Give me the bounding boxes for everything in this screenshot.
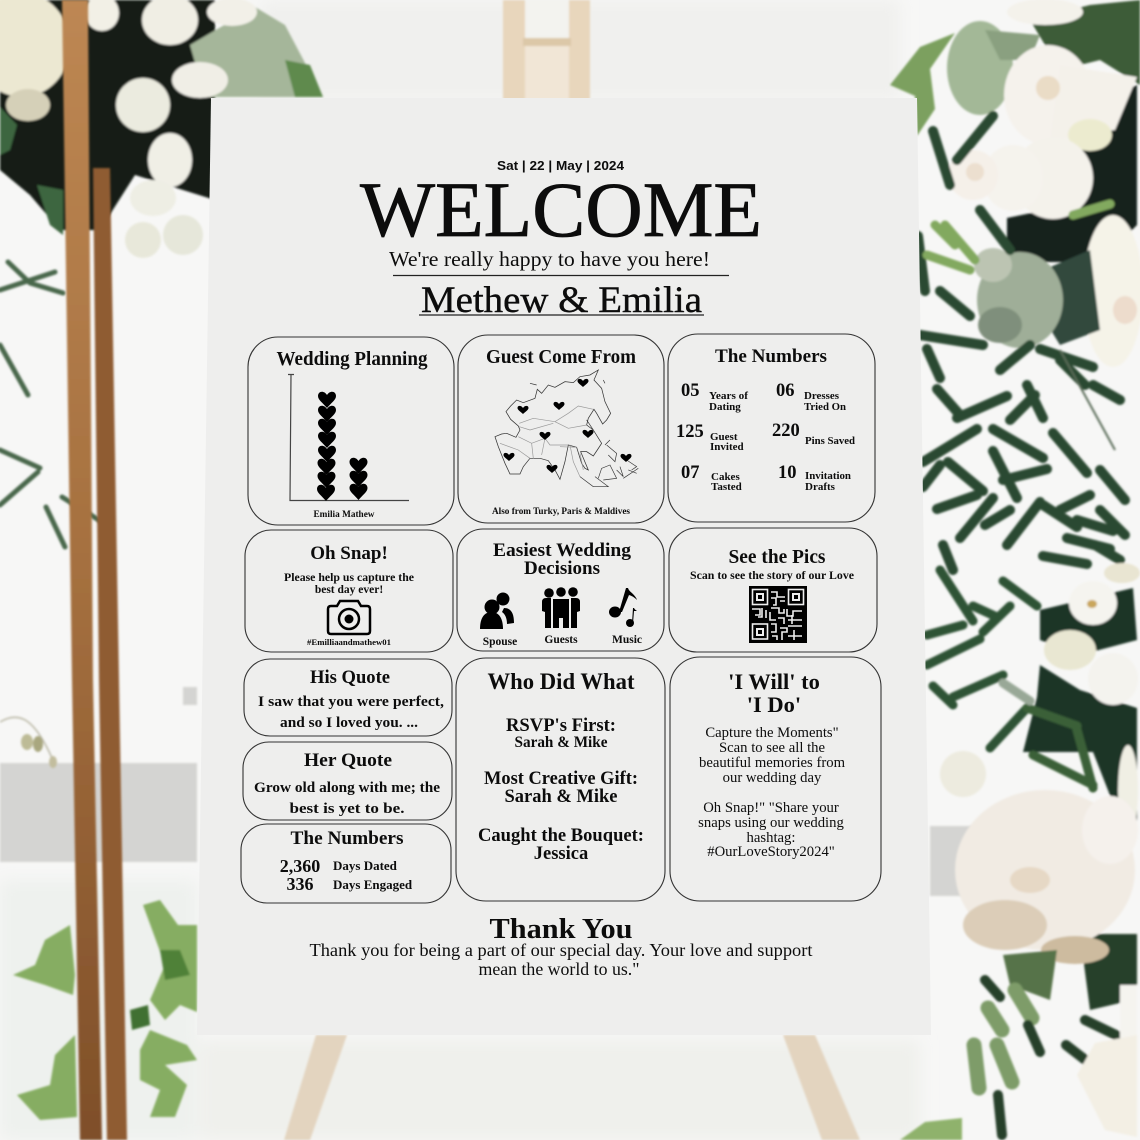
stat: invitation drafts: Drafts [805, 481, 836, 493]
foliage: bottom-left leaves [13, 900, 197, 1120]
share text: Oh Snap!" "Share your [703, 800, 839, 816]
stat: pins saved [772, 421, 855, 447]
easel legs [284, 1035, 860, 1140]
map caption: Also from Turky, Paris & Maldives [492, 507, 630, 517]
item: caught the bouquet: Jessica [534, 844, 588, 864]
capture text [699, 725, 846, 786]
share text: #OurLoveStory2024" [707, 844, 835, 860]
heading: oh snap: Oh Snap! [310, 543, 388, 564]
request text [284, 572, 414, 596]
heading: easiest decisions: Easiest Wedding [493, 540, 632, 561]
capture text: Scan to see all the [719, 740, 825, 756]
couple names: Methew & Emilia [421, 280, 702, 321]
stat: days dated: Days Dated [333, 858, 398, 873]
panel: his quote [244, 659, 452, 736]
item: most creative gift: Sarah & Mike [504, 787, 618, 807]
fence rails [0, 687, 975, 896]
heading: easiest decisions: Decisions [524, 558, 600, 579]
heading: the numbers: The Numbers [715, 346, 827, 367]
heading: her quote: Her Quote [304, 750, 392, 771]
request text: best day ever! [315, 584, 383, 596]
heart column: Emilia [317, 392, 336, 501]
stat: dresses tried on: Dresses [804, 390, 840, 402]
stat: dresses tried on [776, 381, 846, 413]
foliage: right arrangement [890, 0, 1140, 1140]
quote text [258, 694, 444, 731]
icon labels: Spouse [483, 636, 517, 648]
thank you heading: Thank You [490, 913, 632, 945]
panel: who did what [456, 658, 665, 901]
stat: cakes tasted: Tasted [711, 481, 742, 493]
stat: pins saved: 220 [772, 421, 800, 441]
stat: days engaged: Days Engaged [333, 877, 413, 892]
heading: I will to I do [728, 669, 820, 717]
stat: invitation drafts: Invitation [805, 470, 851, 482]
item: caught the bouquet [478, 825, 644, 864]
map of Asia [495, 370, 638, 487]
stat: days dated: 2,360 [280, 856, 320, 876]
panel: guest come from [458, 335, 664, 523]
stat: invitation drafts [778, 463, 851, 493]
chart labels: Emilia Mathew [314, 509, 375, 519]
stat: guest invited: Invited [710, 441, 744, 453]
thank you message: mean the world to us." [478, 959, 640, 979]
capture text: Capture the Moments" [705, 725, 839, 741]
icon: guests [542, 587, 580, 628]
request text: Please help us capture the [284, 572, 414, 584]
item: RSVP first: Sarah & Mike [514, 734, 608, 751]
stat: cakes tasted: 07 [681, 463, 700, 483]
stat: pins saved: Pins Saved [805, 435, 855, 447]
quote text: I saw that you were perfect, [258, 694, 444, 710]
stat: guest invited: 125 [676, 422, 704, 442]
heart column: Mathew [350, 458, 368, 500]
easel top [503, 0, 590, 100]
heading: the numbers: The Numbers [290, 828, 404, 849]
icon labels: Guests [544, 634, 578, 646]
title: WELCOME: WELCOME [360, 166, 762, 253]
share text: hashtag: [747, 830, 795, 846]
subtitle: We're really happy to have you here! [389, 247, 710, 271]
panel: oh snap [245, 530, 453, 652]
stat: days dated [280, 856, 398, 876]
heading: see the pics: See the Pics [728, 547, 826, 568]
stat: guest invited [676, 422, 744, 453]
capture text: beautiful memories from [699, 755, 846, 771]
poster board [197, 98, 931, 1035]
thank you message [310, 940, 812, 979]
panel: see the pics [669, 528, 877, 652]
share text [698, 800, 844, 860]
panel: easiest wedding decisions [457, 529, 664, 651]
stat: guest invited: Guest [710, 431, 738, 443]
capture text: our wedding day [723, 770, 822, 786]
item: RSVP first [506, 715, 616, 751]
icon: camera [328, 601, 370, 634]
stat: dresses tried on: 06 [776, 381, 794, 401]
heading: guest come from: Guest Come From [486, 347, 636, 368]
item: RSVP first: RSVP's First: [506, 715, 616, 736]
quote text [254, 780, 441, 817]
item: most creative gift [484, 768, 638, 807]
stat: days engaged [286, 874, 413, 894]
stat: years of dating [681, 381, 748, 413]
stat: years of dating: 05 [681, 381, 700, 401]
icon: QR code [749, 586, 807, 643]
stat: years of dating: Years of [709, 390, 748, 402]
heading: his quote: His Quote [310, 668, 390, 688]
panel: the numbers [668, 334, 875, 522]
hashtag: #Emilliaandmathew01 [307, 637, 391, 647]
panel: wedding planning [248, 337, 454, 525]
stat: dresses tried on: Tried On [804, 401, 846, 413]
heading: wedding planning: Wedding Planning [276, 349, 428, 370]
scan text: Scan to see the story of our Love [690, 570, 854, 582]
foliage: top-left arrangement [0, 0, 323, 768]
heading: I will to I do: 'I Do' [747, 692, 801, 717]
item: most creative gift: Most Creative Gift: [484, 768, 638, 789]
icon labels [483, 634, 642, 648]
panel: the numbers (small) [241, 824, 451, 903]
icon labels: Music [612, 634, 642, 646]
panel: her quote [243, 742, 452, 820]
wooden frame: left posts [62, 0, 127, 1140]
quote text: Grow old along with me; the [254, 780, 441, 796]
heading: who did what: Who Did What [488, 669, 635, 694]
stat: cakes tasted: Cakes [711, 471, 740, 483]
date: Sat | 22 | May | 2024 [497, 159, 624, 173]
stat: invitation drafts: 10 [778, 463, 796, 483]
icon: music notes [609, 588, 637, 627]
heading: easiest decisions [493, 540, 632, 579]
quote text: best is yet to be. [290, 801, 404, 817]
icon: spouse [480, 592, 514, 629]
item: caught the bouquet: Caught the Bouquet: [478, 825, 644, 846]
map hearts [504, 379, 632, 473]
stat: years of dating: Dating [709, 401, 741, 413]
share text: snaps using our wedding [698, 815, 844, 831]
quote text: and so I loved you. ... [280, 715, 418, 731]
stat: days engaged: 336 [286, 874, 314, 894]
stat: cakes tasted [681, 463, 742, 493]
thank you message: Thank you for being a part of our special day. Your love and support [310, 940, 812, 960]
chart axes [288, 374, 409, 500]
heading: I will to I do: 'I Will' to [728, 669, 820, 694]
panel: I will to I do [670, 657, 881, 901]
